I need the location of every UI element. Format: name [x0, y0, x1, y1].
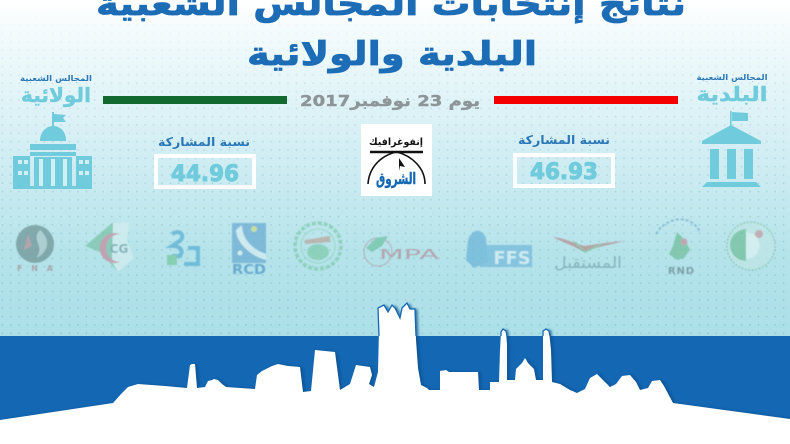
logo: RND	[656, 219, 700, 277]
blue band	[0, 336, 790, 444]
logo: Algeria map with crescent	[85, 222, 134, 272]
logo: Al Moustakbal: المستقبل	[554, 253, 622, 272]
logo: blue Arabic emblem	[167, 232, 198, 265]
participation right: نسبة المشاركة	[518, 133, 610, 147]
participation left: 44.96	[171, 162, 239, 187]
background gradient	[0, 0, 790, 337]
skyline silhouette	[0, 303, 790, 444]
right heading: municipal councils: المجالس الشعبية	[696, 73, 768, 83]
logo: MPA	[364, 236, 439, 266]
date: يوم 23 نوفمبر2017	[300, 92, 480, 110]
logo: FNA: FNA	[17, 264, 54, 273]
icon: municipal building	[702, 111, 761, 187]
participation left: نسبة المشاركة	[158, 135, 250, 149]
title	[96, 0, 686, 74]
logo: FLN	[727, 222, 775, 270]
logo: infographic Echorouk: الشروق	[376, 169, 416, 188]
left heading: provincial councils: المجالس الشعبية	[20, 74, 92, 84]
left heading: provincial councils: الولائية	[21, 83, 91, 107]
green divider bar	[103, 96, 287, 104]
logo: green wreath	[295, 223, 341, 269]
logo: FNA	[16, 225, 54, 273]
participation left	[156, 135, 254, 187]
logo: infographic Echorouk: إنفوغرافيك	[369, 137, 423, 148]
logo: Algeria map with crescent: CG	[110, 242, 128, 256]
red divider bar	[494, 96, 678, 104]
logo: Al Moustakbal	[553, 237, 624, 272]
logo: RND: RND	[668, 266, 694, 277]
logo: RCD: RCD	[232, 263, 266, 278]
logo: FFS	[466, 231, 532, 269]
logo: FFS: FFS	[494, 248, 530, 269]
title: البلدية والولائية	[247, 34, 537, 74]
icon: provincial building	[13, 112, 92, 189]
logo: RCD	[232, 223, 266, 278]
participation right: 46.93	[530, 160, 598, 185]
participation right	[515, 133, 613, 186]
logo: infographic Echorouk	[361, 124, 432, 196]
right heading: municipal councils	[696, 73, 768, 106]
right heading: municipal councils: البلدية	[696, 82, 768, 106]
logo: MPA: MPA	[379, 248, 439, 263]
party logos row	[16, 219, 775, 278]
